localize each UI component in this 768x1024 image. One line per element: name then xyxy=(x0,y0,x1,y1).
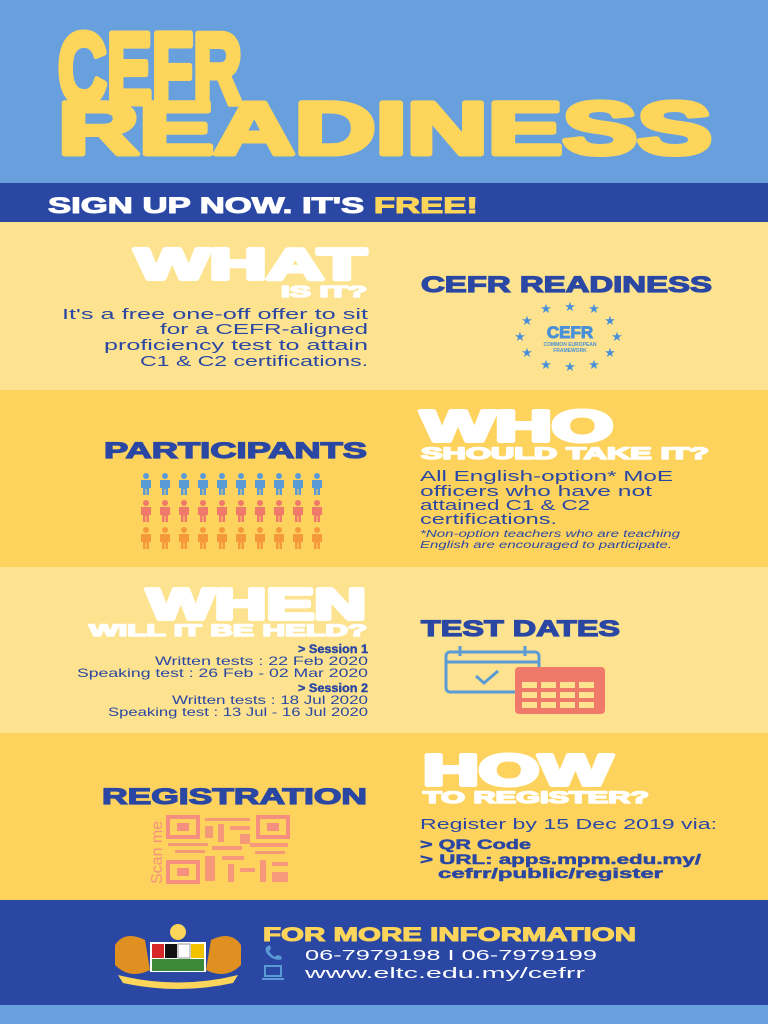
icon: cefr stars logo: ★ xyxy=(540,301,552,316)
banner: sign up: SIGN UP NOW. IT'S FREE! xyxy=(48,193,478,218)
heading: test dates: TEST DATES xyxy=(421,616,620,641)
heading: cefr readiness: CEFR READINESS xyxy=(421,272,712,297)
text: sessions: Speaking test : 13 Jul - 16 Jul 2020 xyxy=(108,705,368,719)
text: sessions: > Session 1 xyxy=(298,642,368,656)
heading: participants: PARTICIPANTS xyxy=(104,438,367,463)
text: how to register: cefrr/public/register xyxy=(438,865,664,881)
panel: who xyxy=(0,390,768,567)
icon: cefr stars logo: ★ xyxy=(588,357,600,372)
text: how to register: > URL: apps.mpm.edu.my/ xyxy=(420,851,701,867)
icon: qr code: Scan me xyxy=(149,821,166,884)
heading: when xyxy=(89,580,367,640)
text: how to register xyxy=(420,816,717,881)
panel: when xyxy=(0,567,768,733)
icon: cefr stars logo: ★ xyxy=(521,313,533,328)
text: website: www.eltc.edu.my/cefrr xyxy=(303,965,585,982)
text: how to register: > QR Code xyxy=(420,836,531,852)
title xyxy=(58,13,712,170)
heading: what: IS IT? xyxy=(281,284,367,301)
text: sessions: Written tests : 18 Jul 2020 xyxy=(172,693,368,707)
icon: cefr stars logo xyxy=(514,299,623,374)
heading: who xyxy=(421,402,709,463)
icon: cefr stars logo: ★ xyxy=(540,357,552,372)
text: what description xyxy=(62,306,369,370)
heading: what xyxy=(135,240,367,301)
icon: cefr stars logo: CEFR xyxy=(547,323,593,342)
heading: how: HOW xyxy=(423,746,613,795)
icon: people rows xyxy=(141,473,322,549)
icon: qr code xyxy=(149,817,288,884)
icon: cefr stars logo: ★ xyxy=(564,359,576,374)
text: who description: *Non-option teachers who are teaching xyxy=(420,529,681,540)
title: CEFR xyxy=(58,13,242,125)
text: what description: It's a free one-off offer to sit xyxy=(62,306,369,323)
text: phone: 06-7979198 I 06-7979199 xyxy=(305,947,597,964)
icon: cefr stars logo: ★ xyxy=(521,345,533,360)
heading: what: WHAT xyxy=(135,240,366,289)
text: what description: C1 & C2 certifications. xyxy=(140,353,368,370)
icon: cefr stars logo: ★ xyxy=(604,313,616,328)
icon: cefr stars logo: ★ xyxy=(514,329,526,344)
icon: phone xyxy=(266,945,282,960)
text: who description: certifications. xyxy=(420,511,557,528)
heading: registration: REGISTRATION xyxy=(102,784,367,809)
text: who description: All English-option* MoE xyxy=(420,468,673,485)
panel: what is it xyxy=(0,222,768,390)
heading: when: WHEN xyxy=(147,580,366,629)
icon: cefr stars logo: ★ xyxy=(611,329,623,344)
heading: who: WHO xyxy=(421,402,613,451)
footer xyxy=(0,900,768,1005)
heading: how xyxy=(423,746,649,807)
banner: sign up xyxy=(0,183,768,222)
title: READINESS xyxy=(58,87,712,170)
text: sessions: > Session 2 xyxy=(298,681,368,695)
heading: who: SHOULD TAKE IT? xyxy=(421,444,709,463)
heading: how: TO REGISTER? xyxy=(423,788,649,807)
text: what description: proficiency test to attain xyxy=(104,337,368,354)
heading: for more information: FOR MORE INFORMATION xyxy=(263,925,636,946)
icon: cefr stars logo: FRAMEWORK xyxy=(553,348,587,354)
text: who description: officers who have not xyxy=(420,483,653,500)
icon: cefr stars logo: ★ xyxy=(588,301,600,316)
text: sessions: Written tests : 22 Feb 2020 xyxy=(155,654,368,668)
icon: coat of arms xyxy=(115,924,241,989)
panel: how to register xyxy=(0,733,768,900)
text: sessions: Speaking test : 26 Feb - 02 Mar 2020 xyxy=(77,666,368,680)
icon: cefr stars logo: ★ xyxy=(604,345,616,360)
icon: calendars xyxy=(446,646,605,714)
text: what description: for a CEFR-aligned xyxy=(160,321,368,338)
text: sessions xyxy=(77,642,368,719)
icon: laptop xyxy=(262,966,284,979)
text: who description: attained C1 & C2 xyxy=(420,497,590,514)
text: how to register: Register by 15 Dec 2019 via: xyxy=(420,816,717,833)
heading: when: WILL IT BE HELD? xyxy=(89,621,367,640)
text: who description: English are encouraged to participate. xyxy=(420,540,672,551)
icon: cefr stars logo: COMMON EUROPEAN xyxy=(543,342,597,348)
text: who description xyxy=(420,468,681,551)
icon: cefr stars logo: ★ xyxy=(564,299,576,314)
